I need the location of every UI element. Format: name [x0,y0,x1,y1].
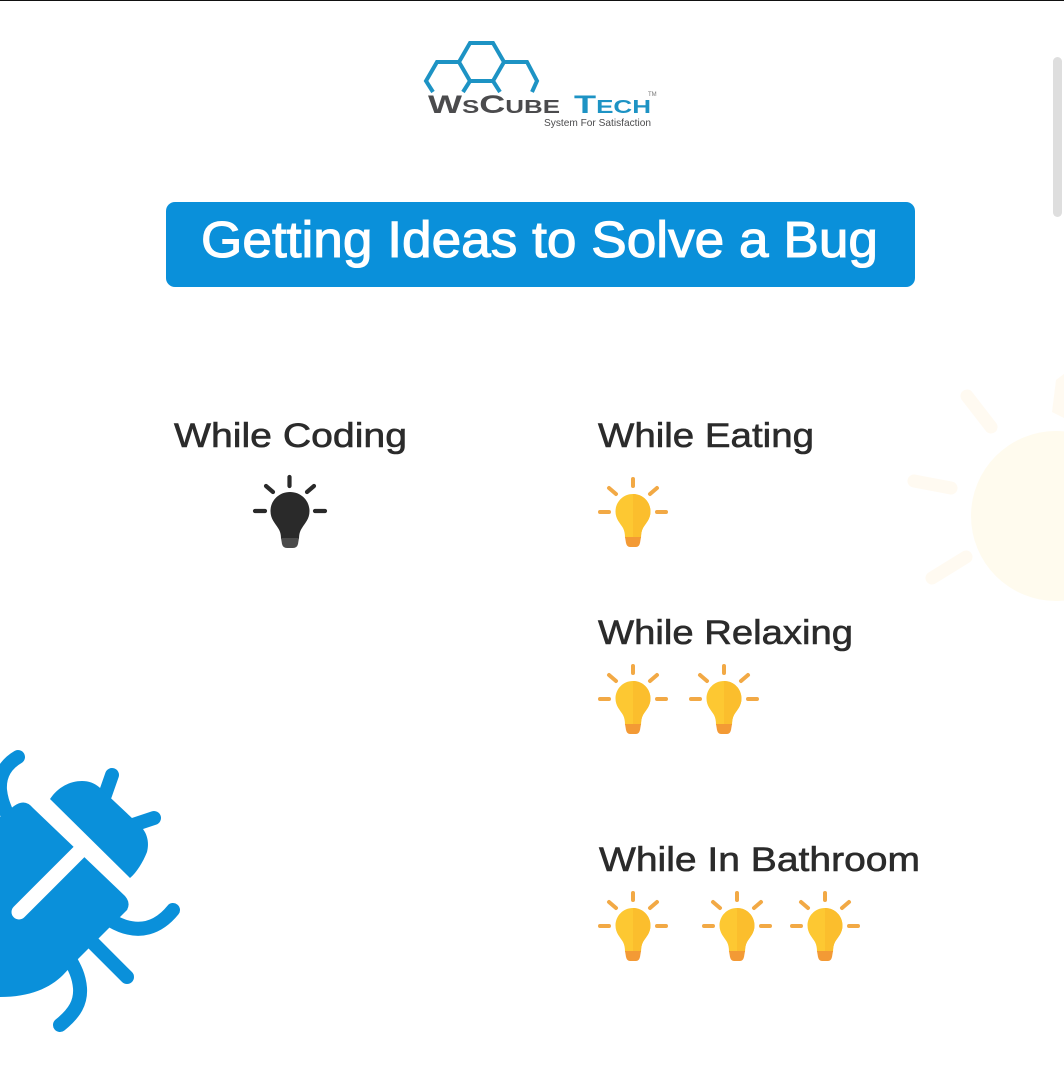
label: while in bathroom: While In Bathroom [599,841,920,879]
logo hexagons [426,43,537,92]
column: while in bathroom [599,841,920,961]
scrollbar [1053,57,1062,217]
logo wordmark: WsCube [428,91,560,119]
icon: bulb [600,479,666,547]
column: while relaxing [598,614,853,734]
icons: two bulbs [600,666,757,734]
bug head [50,781,148,878]
icon: bug illustration [0,757,173,1025]
bug body [0,802,129,997]
label: while relaxing: While Relaxing [598,614,853,652]
title text: Getting Ideas to Solve a Bug [201,211,878,268]
trademark: TM [648,92,657,98]
icons: three bulbs [600,893,858,961]
column: while coding [174,417,407,548]
bug legs and antennae [0,757,173,1025]
label: while coding: While Coding [174,417,407,455]
background sun decoration [914,374,1064,601]
icon: dark light bulb [255,477,325,548]
label: while eating: While Eating [598,417,814,455]
logo wordmark accent: Tech [574,91,651,119]
column: while eating [598,417,814,547]
logo tagline: System For Satisfaction [544,117,651,129]
title banner [166,202,915,287]
top edge line [0,0,1064,1]
logo: WsCube Tech [426,43,657,129]
bug shell stripe [19,851,80,912]
